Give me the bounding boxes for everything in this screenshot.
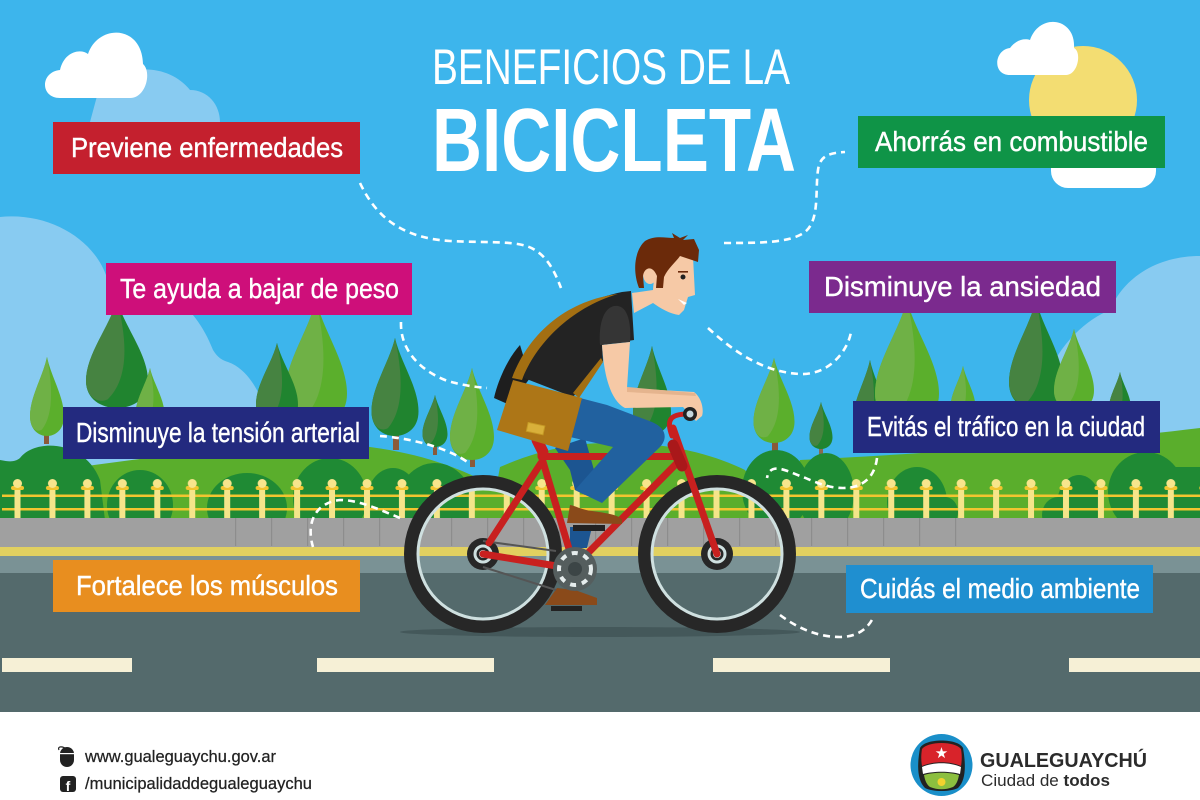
green hills	[60, 428, 1200, 520]
rear leg	[555, 438, 594, 495]
head and neck	[632, 253, 695, 315]
cloud: below sun	[1051, 150, 1156, 188]
label: te ayuda a bajar de peso	[106, 263, 412, 315]
icon: facebook: f	[66, 778, 71, 794]
logo wordmark	[980, 748, 1147, 790]
lower shoe	[545, 588, 597, 605]
upper shoe	[567, 505, 622, 524]
logo: Gualeguaychú crest	[910, 734, 972, 796]
bushes	[0, 446, 1200, 547]
label: fortalece los músculos: Fortalece los músculos	[76, 570, 338, 601]
icon: facebook	[60, 776, 76, 794]
label: ahorrás en combustible	[858, 116, 1165, 168]
cyclist and bicycle	[410, 233, 790, 626]
bicycle frame	[483, 414, 717, 569]
footer band	[0, 712, 1200, 800]
crank gear	[553, 547, 597, 591]
road	[0, 573, 1200, 712]
front leg	[560, 398, 665, 503]
title: BICICLETA	[432, 91, 796, 191]
label: cuidás el medio ambiente	[846, 565, 1153, 613]
pale background clouds	[0, 69, 1200, 470]
fence	[0, 478, 1200, 519]
label: cuidás el medio ambiente: Cuidás el medio ambiente	[860, 573, 1140, 604]
label: previene enfermedades	[53, 122, 360, 174]
torso	[524, 291, 634, 397]
chain	[483, 541, 556, 590]
sleeve	[600, 306, 630, 345]
bag clasp	[526, 422, 545, 435]
handlebar grip	[683, 407, 697, 421]
upper pedal	[573, 525, 605, 531]
hair	[635, 233, 699, 288]
smile	[678, 299, 687, 305]
label: ahorrás en combustible: Ahorrás en combustible	[875, 126, 1148, 157]
title	[432, 39, 796, 191]
rear wheel	[410, 482, 556, 626]
label: evitás el tráfico en la ciudad	[853, 401, 1160, 453]
trees	[30, 300, 1131, 467]
facebook handle text: /municipalidaddegualeguaychu	[85, 774, 312, 793]
sidewalk	[0, 518, 1200, 573]
cloud: top left	[45, 33, 147, 98]
logo: Gualeguaychú crest: ★	[935, 744, 948, 762]
logo wordmark: GUALEGUAYCHÚ	[980, 748, 1147, 772]
front wheel	[644, 482, 790, 626]
bag strap	[512, 294, 618, 380]
arm	[602, 342, 703, 421]
title: BENEFICIOS DE LA	[432, 39, 791, 95]
website text: www.gualeguaychu.gov.ar	[84, 747, 276, 766]
eye	[680, 274, 686, 280]
label: fortalece los músculos	[53, 560, 360, 612]
dashed connectors	[311, 152, 877, 637]
messenger bag	[497, 380, 582, 451]
cloud: top right	[997, 22, 1078, 75]
cape shadow behind bag	[494, 345, 530, 405]
icon: mouse	[59, 747, 74, 767]
ear	[643, 264, 657, 284]
label: disminuye la ansiedad: Disminuye la ansiedad	[824, 271, 1101, 302]
label: disminuye la ansiedad	[809, 261, 1116, 313]
label: te ayuda a bajar de peso: Te ayuda a bajar de peso	[120, 273, 399, 304]
logo wordmark: Ciudad de todos	[981, 771, 1110, 790]
label: disminuye la tensión arterial	[63, 407, 369, 459]
label: disminuye la tensión arterial: Disminuye la tensión arterial	[76, 417, 360, 448]
sun	[1029, 46, 1137, 154]
label: previene enfermedades: Previene enfermedades	[71, 132, 343, 163]
